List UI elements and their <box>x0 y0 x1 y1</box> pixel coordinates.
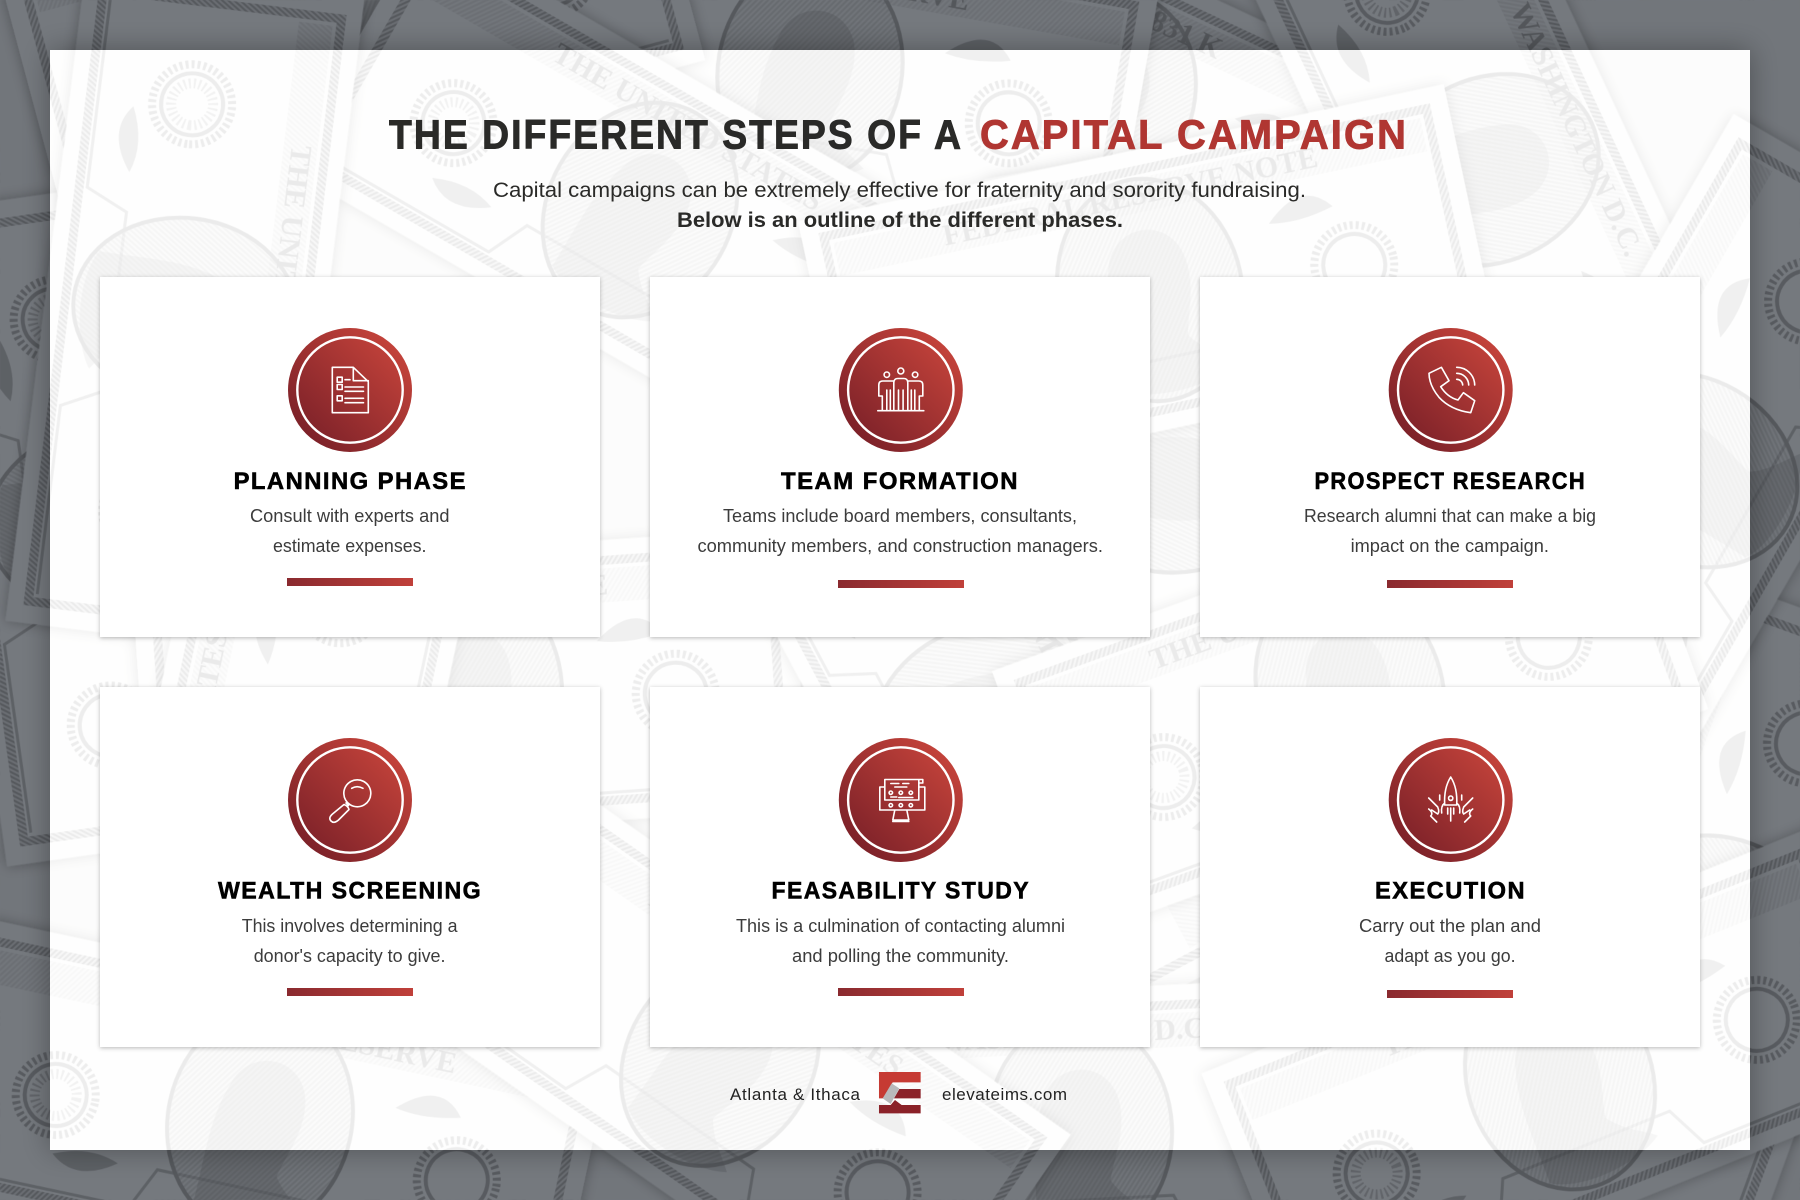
accent bar <box>1387 580 1513 588</box>
description <box>736 915 1065 966</box>
description: Consult with experts and <box>250 505 450 526</box>
panel: team formation <box>650 277 1150 637</box>
heading: TEAM FORMATION <box>781 468 1019 495</box>
footer <box>730 1072 1067 1113</box>
icon: phone <box>1389 328 1513 452</box>
description <box>698 505 1103 556</box>
icon: monitor with document <box>839 738 963 862</box>
description <box>1304 505 1596 556</box>
panel: execution <box>1200 687 1700 1047</box>
accent bar <box>1387 990 1513 998</box>
heading: EXECUTION <box>1375 878 1526 904</box>
description: adapt as you go. <box>1384 945 1516 966</box>
description: Carry out the plan and <box>1359 915 1541 936</box>
panel: wealth screening <box>100 687 600 1047</box>
description <box>242 915 458 966</box>
accent bar <box>838 580 964 588</box>
panel: planning phase <box>100 277 600 637</box>
accent bar <box>287 988 413 996</box>
heading: WEALTH SCREENING <box>218 878 482 904</box>
description: and polling the community. <box>792 945 1009 966</box>
description <box>250 505 450 556</box>
icon: document checklist <box>288 328 412 452</box>
description: estimate expenses. <box>273 535 426 556</box>
intro text: Capital campaigns can be extremely effective for fraternity and sorority fundraising. <box>493 178 1306 202</box>
heading: FEASABILITY STUDY <box>772 878 1030 904</box>
description: community members, and construction managers. <box>698 535 1103 556</box>
description: This is a culmination of contacting alumni <box>736 915 1065 936</box>
icon: rocket launch <box>1389 738 1513 862</box>
icon: magnifying glass <box>288 738 412 862</box>
panel: prospect research <box>1200 277 1700 637</box>
location text: Atlanta & Ithaca <box>730 1085 861 1104</box>
intro text <box>493 178 1306 232</box>
description: donor's capacity to give. <box>254 945 446 966</box>
heading: PROSPECT RESEARCH <box>1314 468 1586 495</box>
logo <box>879 1072 921 1113</box>
title <box>389 112 1408 158</box>
accent bar <box>838 988 964 996</box>
description: impact on the campaign. <box>1351 535 1549 556</box>
description: Teams include board members, consultants, <box>723 505 1077 526</box>
accent bar <box>287 578 413 586</box>
icon: team of people <box>839 328 963 452</box>
title: THE DIFFERENT STEPS OF A <box>389 112 963 158</box>
title: CAPITAL CAMPAIGN <box>980 112 1408 158</box>
description: This involves determining a <box>242 915 458 936</box>
panel: feasability study <box>650 687 1150 1047</box>
intro text: Below is an outline of the different phases. <box>677 208 1123 232</box>
description: Research alumni that can make a big <box>1304 505 1596 526</box>
website text: elevateims.com <box>942 1085 1067 1104</box>
description <box>1359 915 1541 966</box>
heading: PLANNING PHASE <box>234 468 467 495</box>
